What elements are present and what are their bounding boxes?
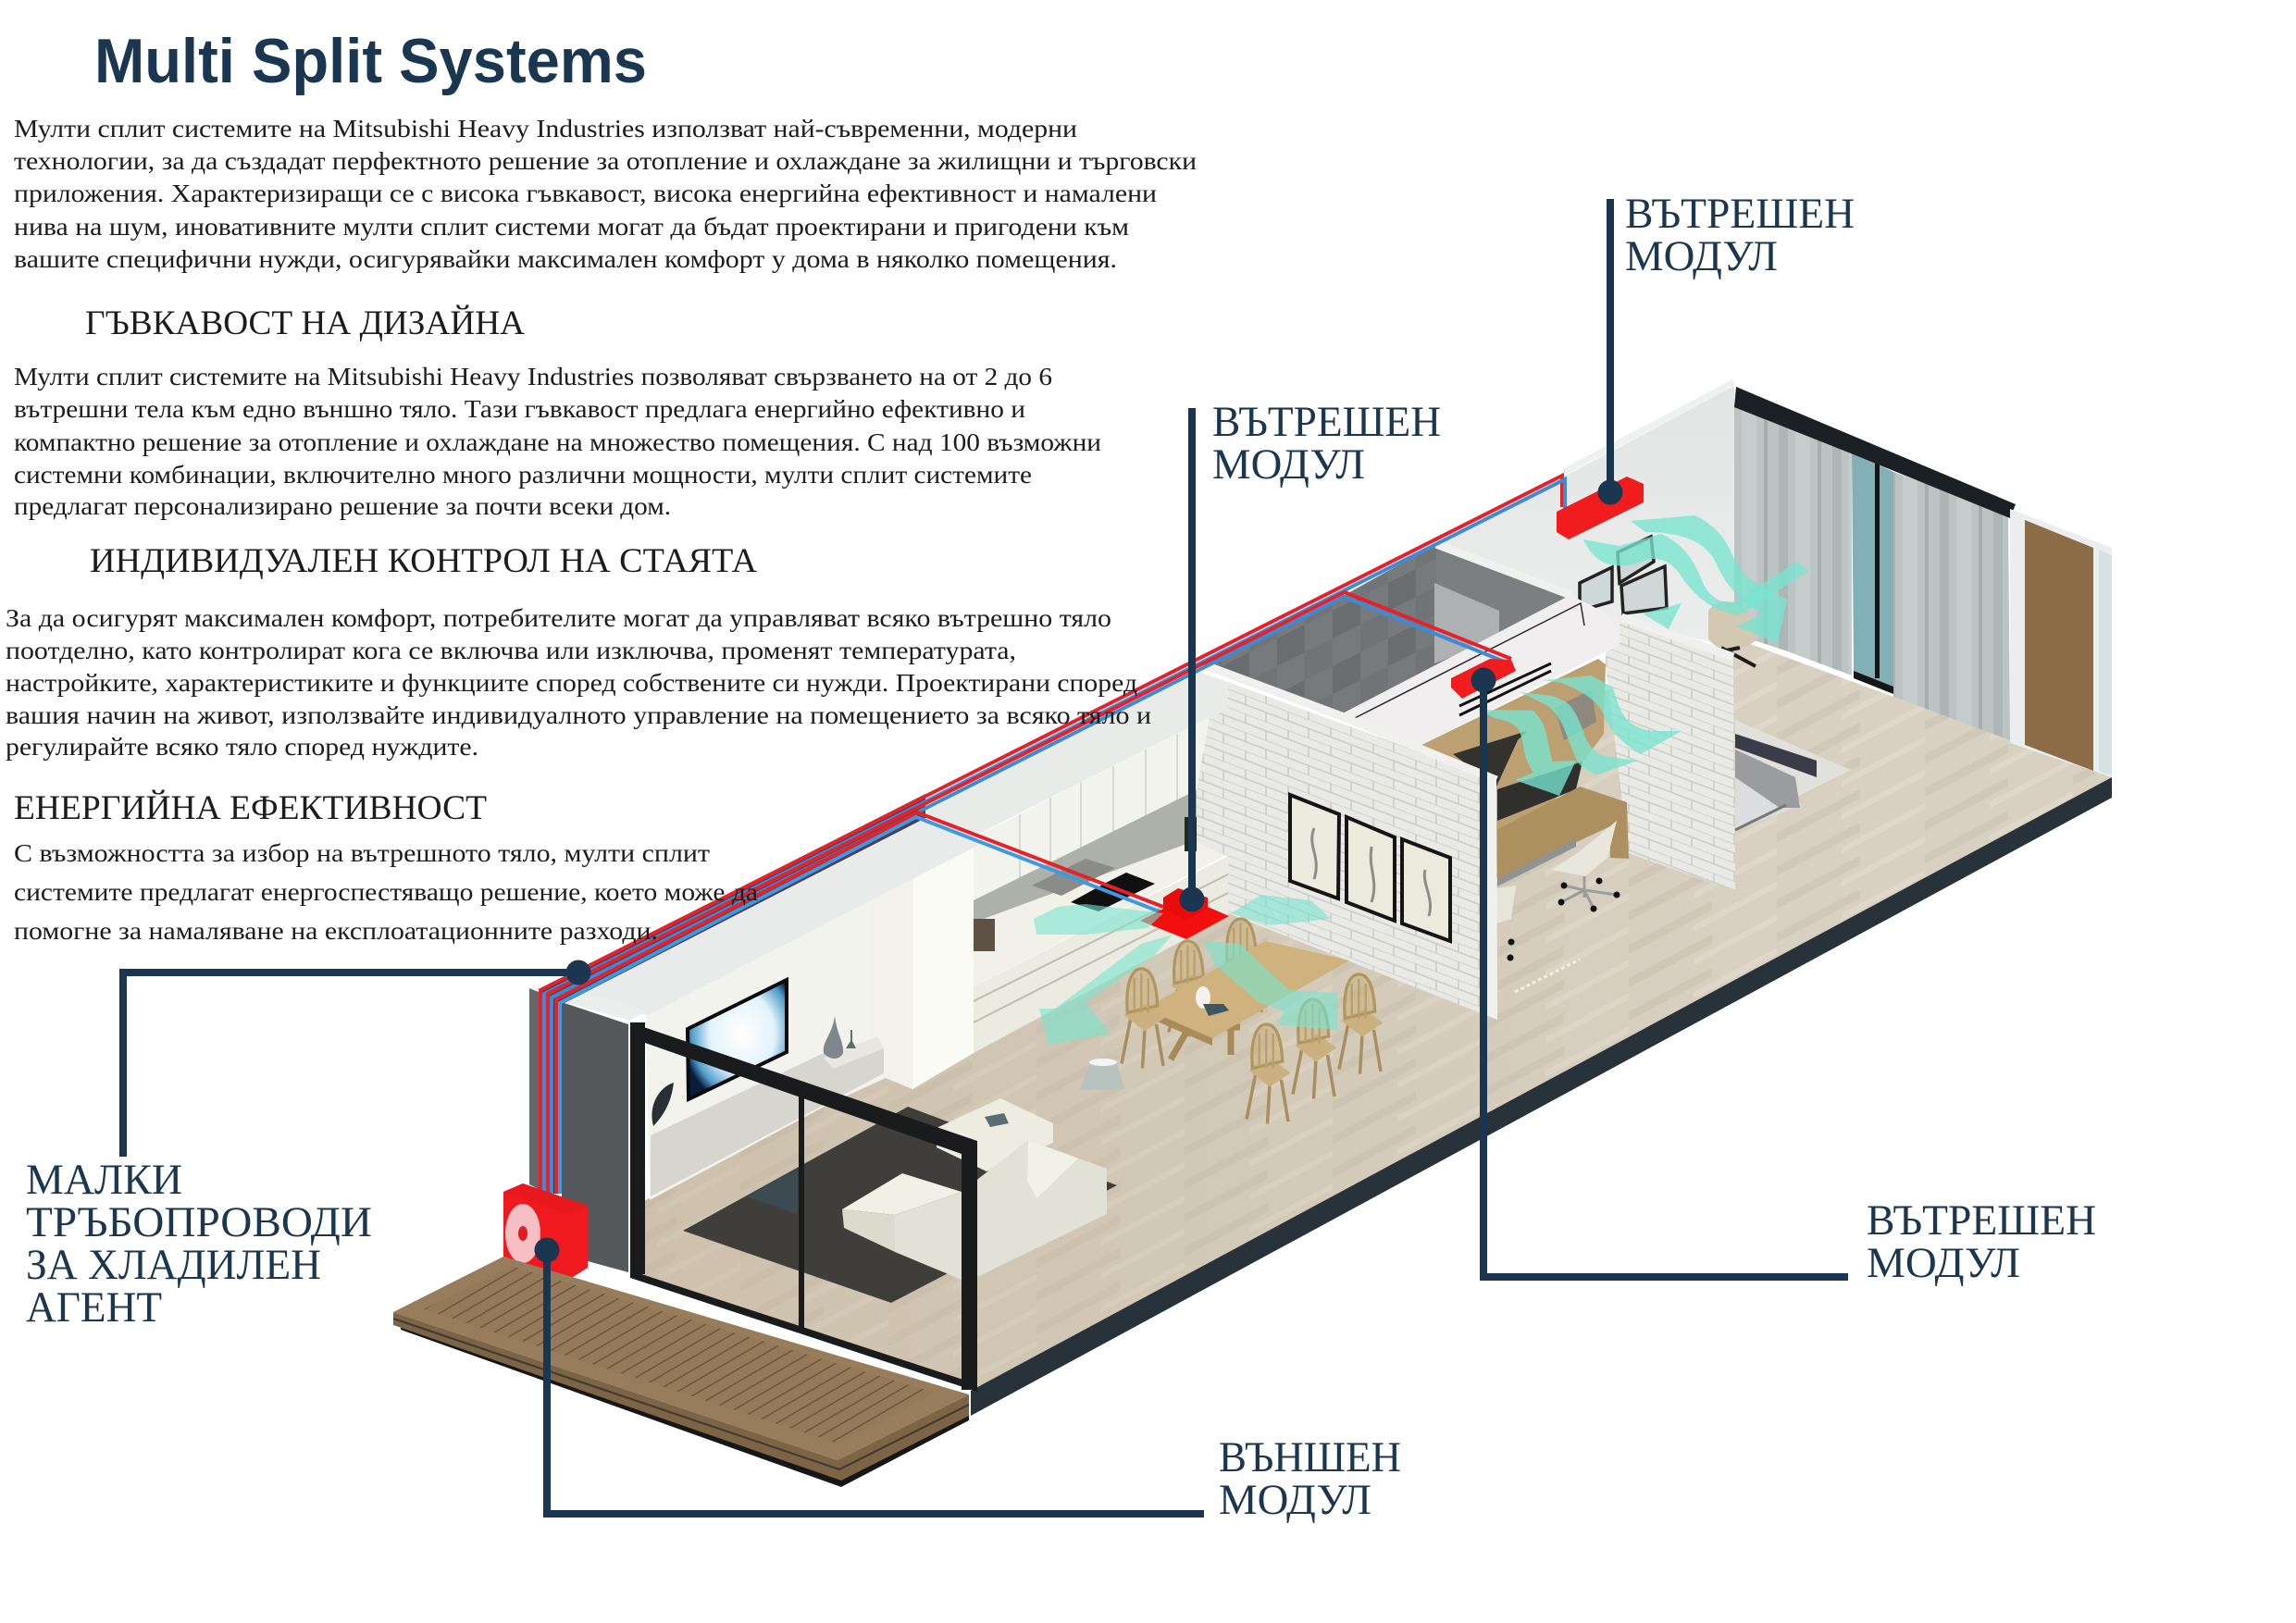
leader line: cassette indoor unit — [1179, 408, 1205, 912]
paragraph: individual room control: вашия начин на живот, използвайте индивидуалното управление на помещението за всяко тяло и — [6, 701, 1151, 729]
label: indoor unit bottom right: ВЪТРЕШЕН — [1867, 1196, 2096, 1245]
paragraph: design flexibility: Мулти сплит системите на Mitsubishi Heavy Industries позволяват свързването на от 2 до 6 — [14, 363, 1052, 390]
bedroom wall — [1436, 386, 1734, 648]
paragraph: energy efficiency: системите предлагат енергоспестяващо решение, което може да — [14, 878, 758, 906]
paragraph: energy efficiency — [14, 839, 758, 945]
heading: design flexibility: ГЪВКАВОСТ НА ДИЗАЙНА — [85, 304, 525, 342]
airflow: cassette — [1034, 895, 1337, 1046]
office ceiling — [1339, 595, 1620, 748]
wall tops — [1208, 544, 1733, 780]
title: Multi Split Systems — [94, 26, 647, 96]
floor base edge — [971, 777, 2112, 1416]
living room wall — [646, 837, 974, 1200]
ceiling slab left — [558, 814, 981, 1015]
indoor unit: wall mounted, office — [1451, 659, 1551, 715]
label: indoor unit centre: ВЪТРЕШЕН — [1212, 398, 1441, 446]
rug — [683, 1107, 1117, 1303]
ceiling slab middle — [917, 669, 1228, 837]
intro paragraph: приложения. Характеризиращи се с висока гъвкавост, висока енергийна ефективност и намалени — [14, 180, 1157, 207]
office ceiling recess line — [1351, 603, 1584, 720]
concrete end wall — [529, 988, 628, 1272]
floor lamp — [1080, 1059, 1124, 1090]
bathroom tiles — [1203, 544, 1570, 715]
paragraph: energy efficiency: помогне за намаляване на експлоатационните разходи. — [14, 917, 658, 945]
label: indoor unit bottom right — [1867, 1196, 2096, 1287]
label: outdoor unit: ВЪНШЕН — [1219, 1433, 1401, 1481]
leader line: refrigerant pipes — [123, 960, 590, 1157]
label: outdoor unit — [1219, 1433, 1401, 1524]
leader line: office indoor unit — [1471, 668, 1848, 1277]
pillar — [872, 837, 974, 1089]
sliding window frame — [630, 1022, 977, 1392]
wooden deck — [393, 1257, 969, 1487]
label: indoor unit top right — [1625, 190, 1855, 280]
building illustration — [393, 382, 2112, 1487]
framed pictures — [1290, 795, 1450, 941]
intro paragraph — [14, 115, 1197, 273]
paragraph: design flexibility: вътрешни тела към едно външно тяло. Тази гъвкавост предлага енергийно ефективно и — [14, 395, 1025, 423]
label: small refrigerant pipes: МАЛКИ — [26, 1156, 182, 1204]
leader line: outdoor unit — [535, 1238, 1204, 1514]
paragraph: individual room control: За да осигурят максимален комфорт, потребителите могат да управляват всяко вътрешно тяло — [6, 604, 1111, 632]
bed — [1735, 720, 1851, 830]
paragraph: energy efficiency: С възможността за избор на вътрешното тяло, мулти сплит — [14, 839, 710, 867]
dining chairs in front of table — [1122, 969, 1383, 1123]
paragraph: design flexibility — [14, 363, 1101, 520]
heading: energy efficiency: ЕНЕРГИЙНА ЕФЕКТИВНОСТ — [14, 788, 487, 827]
intro paragraph: вашите специфични нужди, осигурявайки максимален комфорт у дома в няколко помещения. — [14, 245, 1117, 273]
refrigerant pipe backing — [539, 794, 925, 1005]
indoor unit: ceiling cassette — [1140, 888, 1229, 939]
bedroom wall frames — [1580, 537, 1667, 613]
heading: individual room control: ИНДИВИДУАЛЕН КОНТРОЛ НА СТАЯТА — [90, 542, 757, 580]
dining chairs behind table — [1169, 919, 1264, 1036]
label: indoor unit centre — [1212, 398, 1441, 489]
coffee table — [937, 1098, 1053, 1171]
floor shading — [630, 638, 2112, 1390]
label: small refrigerant pipes: АГЕНТ — [26, 1283, 162, 1332]
brick wall end edge — [1484, 775, 1497, 1020]
door — [2010, 509, 2112, 777]
label: small refrigerant pipes: ТРЪБОПРОВОДИ — [26, 1198, 372, 1246]
paragraph: individual room control: настройките, характеристиките и функциите според собствените си нужди. Проектирани според — [6, 669, 1137, 697]
label: outdoor unit: МОДУЛ — [1219, 1476, 1371, 1524]
airflow: bedroom unit — [1583, 515, 1808, 643]
indoor unit: wall mounted, bedroom — [1557, 477, 1644, 539]
intro paragraph: технологии, за да създадат перфектното решение за отопление и охлаждане за жилищни и търговски — [14, 147, 1197, 175]
curtains and window wall — [1734, 387, 2016, 740]
picture sketches — [1312, 828, 1431, 916]
plant reflected behind glass — [652, 1083, 674, 1126]
low shelf under television — [651, 1036, 884, 1196]
intro paragraph: нива на шум, иновативните мулти сплит системи могат да бъдат проектирани и пригодени към — [14, 213, 1129, 241]
label: indoor unit bottom right: МОДУЛ — [1867, 1239, 2020, 1287]
ceiling slab corner — [531, 987, 646, 1021]
label: small refrigerant pipes: ЗА ХЛАДИЛЕН — [26, 1241, 321, 1289]
paragraph: individual room control: поотделно, като контролират кога се включва или изключва, променят температурата, — [6, 637, 1016, 664]
sofa — [842, 1140, 1107, 1280]
paragraph: design flexibility: предлагат персонализирано решение за почти всеки дом. — [14, 492, 671, 520]
leader line: bedroom indoor unit — [1597, 199, 1623, 505]
paragraph: individual room control: регулирайте всяко тяло според нуждите. — [6, 733, 478, 761]
dining table — [1145, 941, 1349, 1059]
top cap bedroom wall — [1564, 382, 1734, 472]
kitchen — [974, 717, 1228, 1053]
label: indoor unit centre: МОДУЛ — [1212, 440, 1365, 489]
label: indoor unit top right: ВЪТРЕШЕН — [1625, 190, 1855, 238]
intro paragraph: Мулти сплит системите на Mitsubishi Heavy Industries използват най-съвременни, модерни — [14, 115, 1077, 142]
refrigerant pipes — [540, 476, 1565, 1194]
outdoor unit — [503, 1183, 588, 1279]
paragraph: individual room control — [6, 604, 1151, 761]
main brick wall — [1197, 682, 1497, 1020]
paragraph: design flexibility: системни комбинации, включително много различни мощности, мулти сплит системите — [14, 461, 1032, 489]
label: small refrigerant pipes — [26, 1156, 372, 1332]
airflow: office unit — [1478, 675, 1682, 796]
vases — [824, 1015, 856, 1059]
bedroom armchair — [1708, 601, 1758, 666]
label: indoor unit top right: МОДУЛ — [1625, 232, 1778, 280]
television — [688, 980, 787, 1099]
partition brick wall — [1606, 617, 1735, 891]
floor — [630, 638, 2112, 1390]
office — [1416, 659, 1629, 992]
paragraph: design flexibility: компактно решение за отопление и охлаждане на множество помещения. С над 100 възможни — [14, 428, 1101, 456]
